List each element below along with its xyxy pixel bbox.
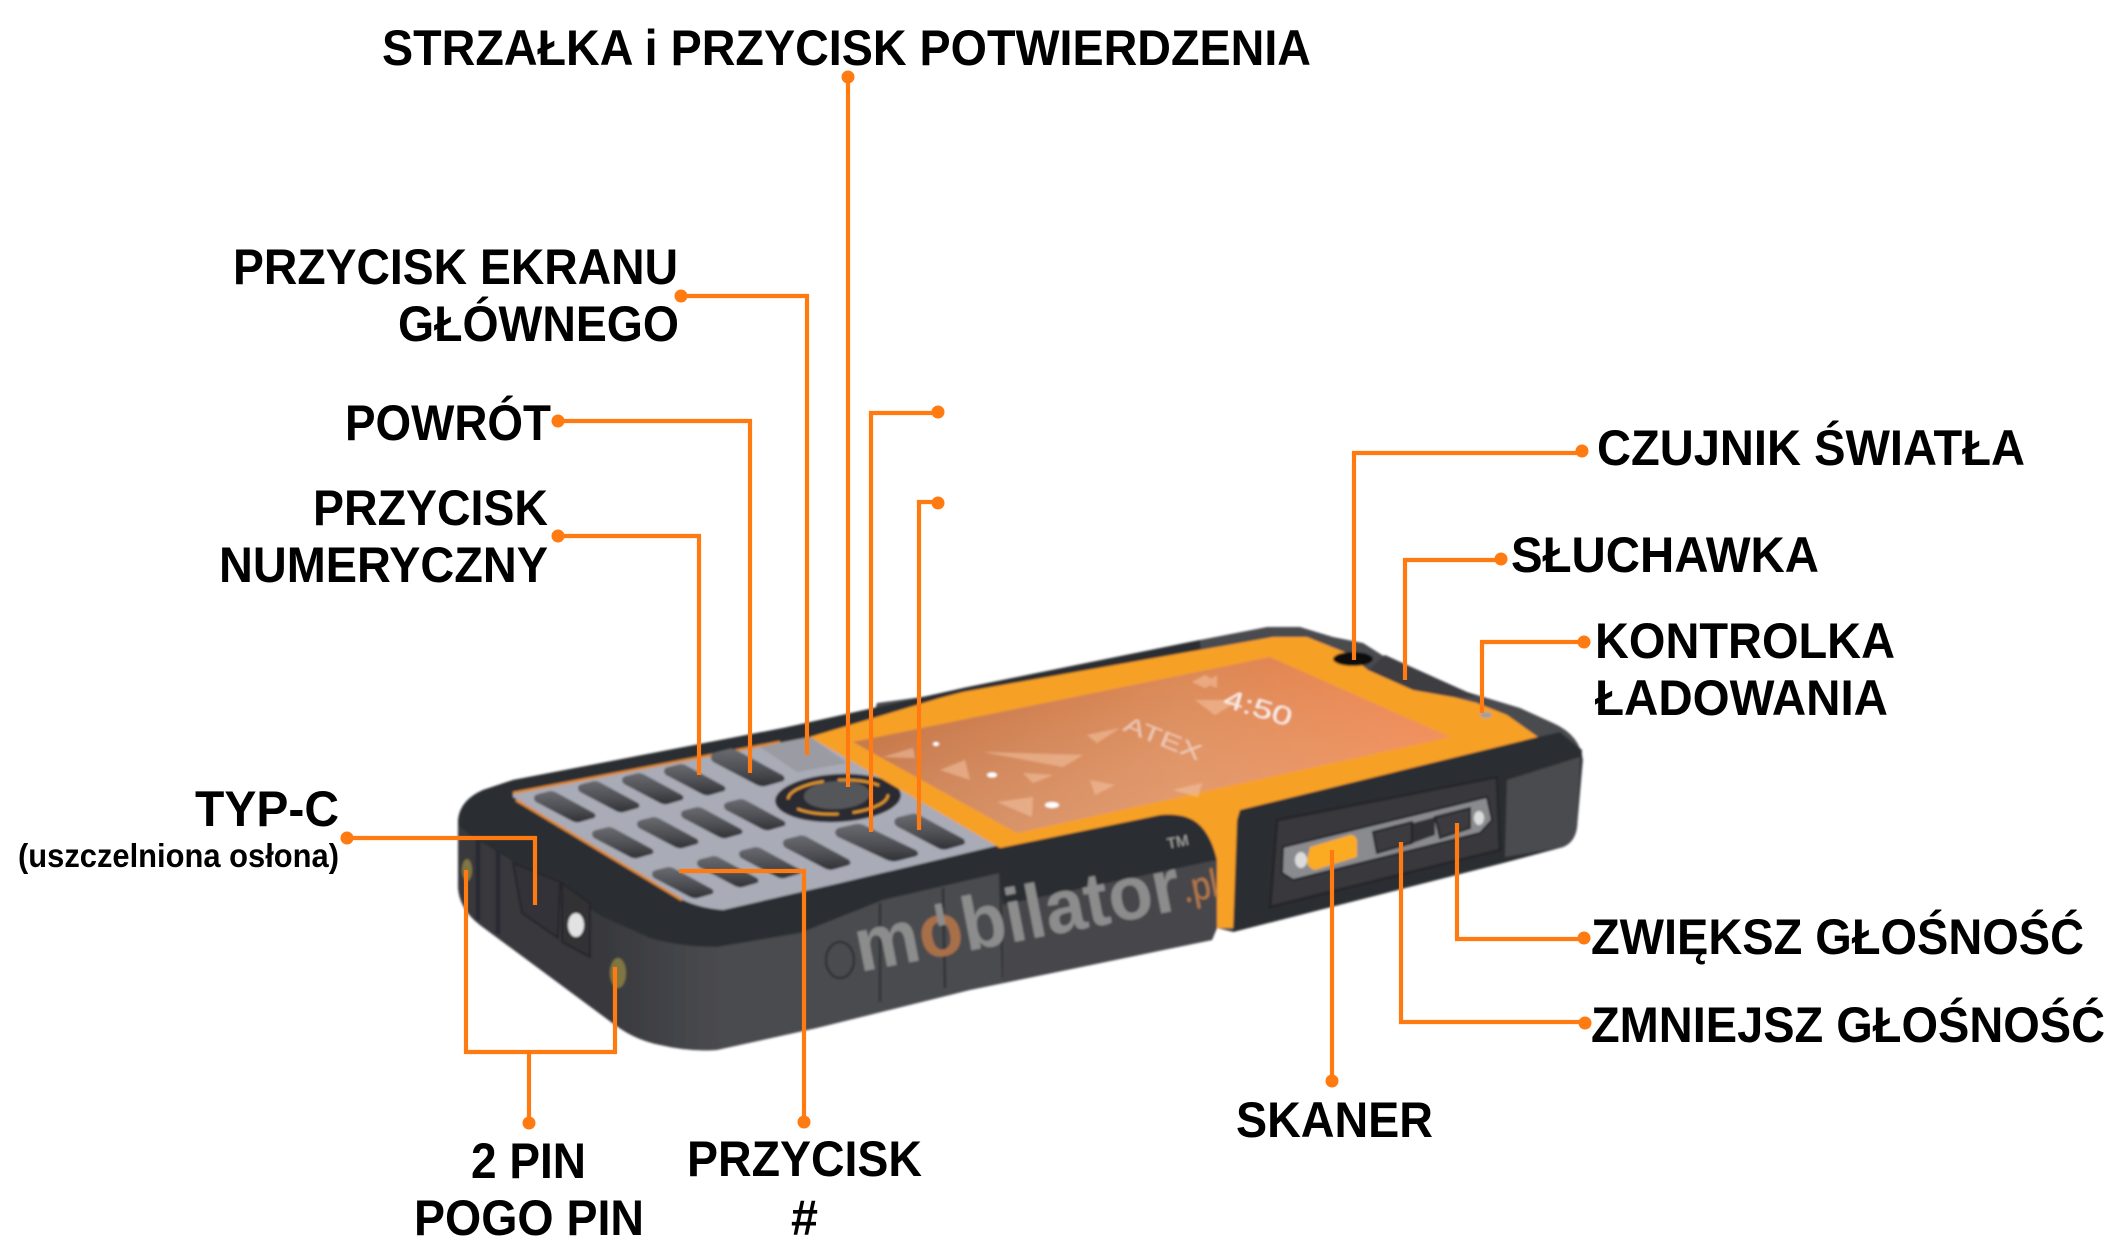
label: numeric key: PRZYCISK	[313, 480, 548, 536]
label: numeric key: NUMERYCZNY	[219, 537, 548, 593]
screen sparkle dots	[933, 742, 1059, 808]
label: hash key	[687, 1131, 922, 1246]
label: type-c	[18, 781, 339, 874]
leader: 2 pin pogo	[466, 870, 615, 1130]
d-pad	[774, 771, 902, 825]
usb cover	[513, 863, 560, 938]
watermark: mobilator	[847, 842, 1187, 989]
label: earpiece: SŁUCHAWKA	[1511, 527, 1819, 583]
volume key bridge	[1413, 817, 1435, 843]
phone body	[458, 627, 1583, 1050]
left side rubber lower	[1003, 858, 1217, 982]
screen	[853, 657, 1450, 833]
left end face	[458, 825, 612, 1022]
pogo pins	[462, 859, 626, 988]
screen wallpaper	[883, 675, 1240, 817]
label: charging led	[1595, 613, 1895, 726]
button plate	[1282, 797, 1492, 880]
label: 2 pin pogo pin: POGO PIN	[414, 1190, 644, 1246]
screen clock: 4:50	[1220, 684, 1296, 732]
light sensor	[1333, 652, 1373, 666]
label: volume down: ZMNIEJSZ GŁOŚNOŚĆ	[1591, 997, 2105, 1053]
label: back: POWRÓT	[345, 395, 551, 451]
right side panel	[1233, 732, 1582, 932]
sim cover with button	[562, 883, 590, 957]
label: charging led: ŁADOWANIA	[1595, 670, 1888, 726]
keypad keys	[534, 749, 965, 898]
left corner seam	[478, 838, 498, 934]
label: charging led: KONTROLKA	[1595, 613, 1895, 669]
label: volume up: ZWIĘKSZ GŁOŚNOŚĆ	[1591, 909, 2084, 965]
label: type-c: TYP-C	[195, 781, 339, 837]
label: scanner: SKANER	[1236, 1092, 1433, 1148]
screen logo: ATEX	[1120, 711, 1206, 765]
screen lower glow	[853, 657, 1450, 833]
watermark: TM	[1166, 832, 1190, 853]
left side rubber top	[1000, 815, 1217, 905]
screws	[1295, 811, 1484, 868]
orange frame	[810, 637, 1538, 928]
leader: unlabelled lower	[919, 496, 944, 830]
leader: type-c	[340, 832, 535, 905]
volume down key	[1373, 822, 1412, 853]
label: 2 pin pogo pin	[414, 1133, 644, 1246]
leader: light sensor	[1354, 444, 1588, 660]
label: home button	[233, 239, 679, 352]
leader: earpiece	[1405, 552, 1508, 680]
leader: charging led	[1482, 636, 1590, 713]
scan button	[1307, 835, 1357, 870]
leader: arrow and confirm button	[842, 70, 854, 787]
label: home button: GŁÓWNEGO	[398, 296, 679, 352]
leader: hash key	[679, 871, 810, 1128]
right end block	[1505, 757, 1580, 857]
charging led	[1480, 712, 1492, 718]
top rim	[458, 640, 1217, 947]
plate orange edge	[513, 742, 780, 900]
leader: scanner	[1326, 850, 1338, 1088]
label: light sensor: CZUJNIK ŚWIATŁA	[1597, 420, 2025, 476]
label: arrow and confirm button: STRZAŁKA i PRZYCISK POTWIERDZENIA	[382, 20, 1311, 76]
leader: volume up	[1457, 823, 1590, 944]
earpiece	[1368, 655, 1478, 697]
label: 2 pin pogo pin: 2 PIN	[471, 1133, 586, 1189]
side button recess	[1270, 777, 1500, 907]
label: type-c: (uszczelniona osłona)	[18, 837, 339, 874]
watermark: .pl	[1178, 862, 1222, 912]
leader: back	[552, 414, 750, 773]
keypad plate	[513, 737, 1000, 910]
leader: volume down	[1401, 842, 1592, 1030]
label: hash key: #	[791, 1190, 818, 1246]
leader: numeric key	[552, 530, 699, 775]
leader: unlabelled upper	[871, 406, 944, 832]
leader: home button	[674, 290, 807, 755]
label: numeric key	[219, 480, 548, 593]
home key	[760, 737, 847, 772]
volume up key	[1435, 808, 1470, 838]
label: hash key: PRZYCISK	[687, 1131, 922, 1187]
side seams	[826, 873, 1003, 1002]
phone illustration	[458, 627, 1583, 1050]
label: home button: PRZYCISK EKRANU	[233, 239, 678, 295]
